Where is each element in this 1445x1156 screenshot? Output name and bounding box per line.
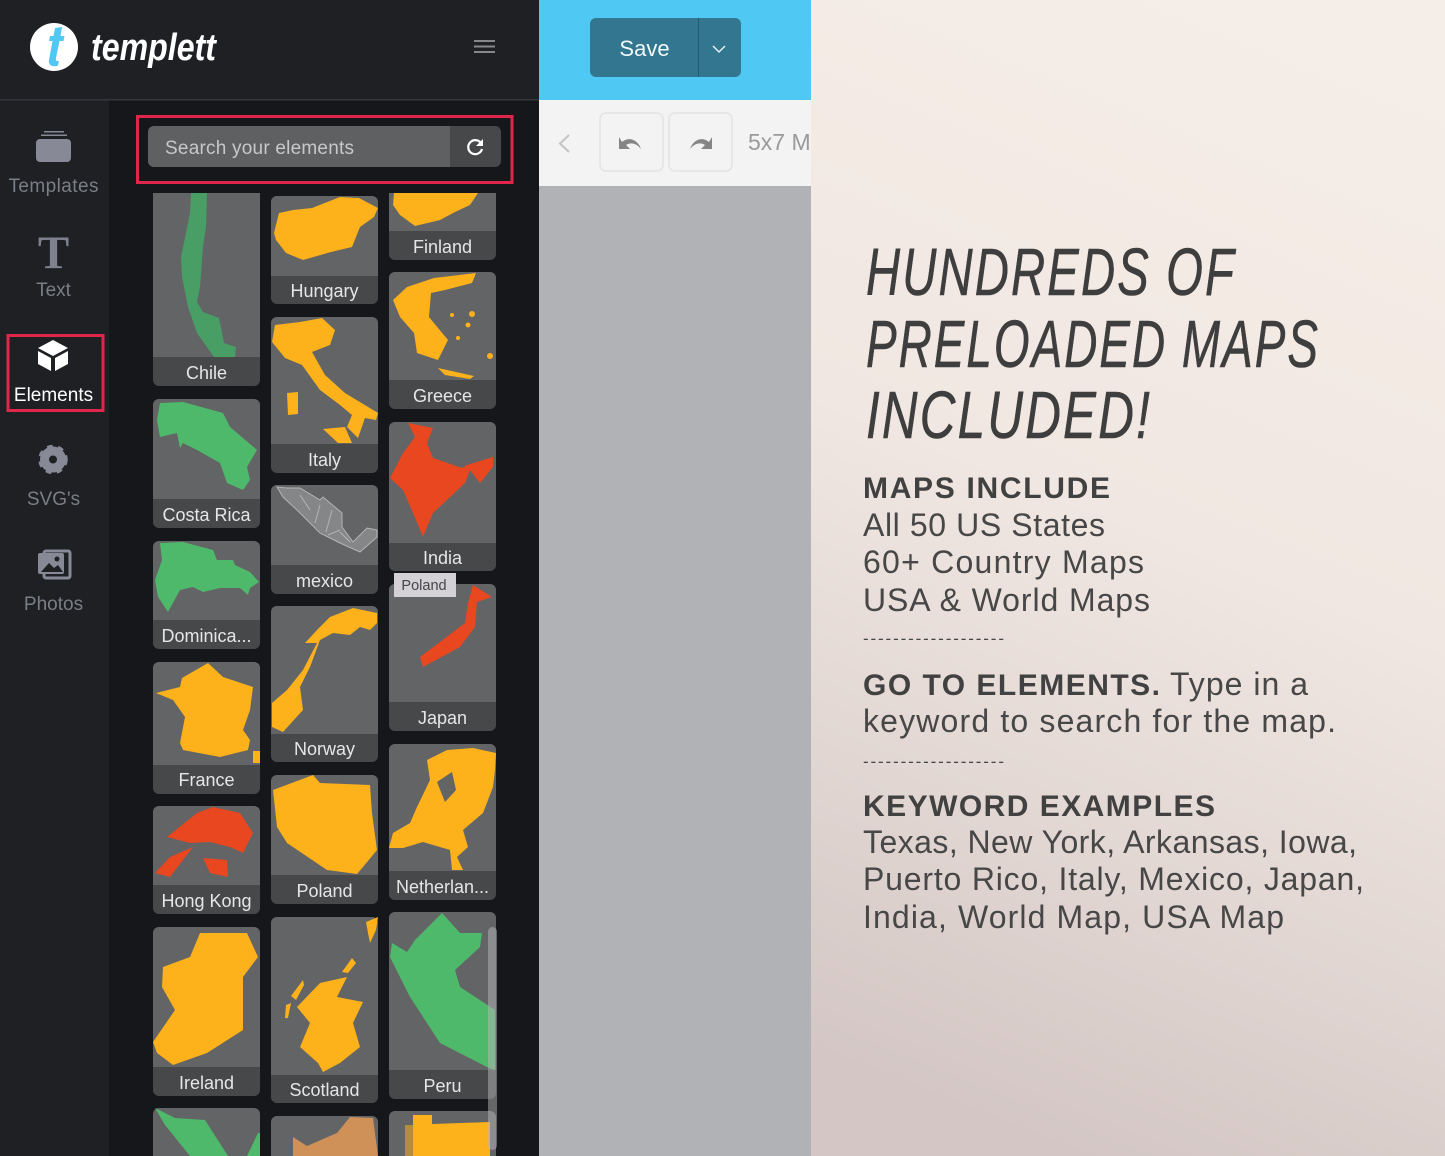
map tile: Norway: Norway [294,739,355,759]
map tile: Mexico green, cropped [153,1108,260,1156]
panel: right text background [811,0,1445,1156]
divider: dashes two: ------------------- [863,752,1004,771]
panel: elements browser background [109,100,539,1156]
button: save [590,18,741,77]
map tile: Ireland [153,927,260,1096]
map tile: Hong Kong: Hong Kong [161,891,252,911]
panel: editor toolbar [539,100,823,186]
map tile: Scotland: Scotland [289,1080,360,1100]
map tile: yellow map, cropped [389,1111,496,1156]
map tile: Costa Rica: Costa Rica [162,505,252,525]
tooltip: Poland [394,573,456,597]
map tile: Italy [271,317,378,473]
text block: maps include: MAPS INCLUDE [863,472,1110,505]
button: redo [669,113,732,171]
text block: go to elements: GO TO ELEMENTS. [863,669,1160,702]
nav: svgs [27,446,80,510]
map tile: Scotland [271,917,378,1103]
map tile: Hungary: Hungary [290,281,359,301]
text block: maps include: 60+ Country Maps [863,544,1144,580]
nav: photos: Photos [24,594,83,615]
text block: maps include: USA & World Maps [863,582,1150,618]
map tile: Greece [389,272,496,409]
map tile: Finland [389,193,496,260]
text block: keyword examples: India, World Map, USA Map [863,899,1284,935]
text block: maps include: All 50 US States [863,507,1105,543]
nav: svgs: SVG's [27,489,80,510]
search box with highlight: Search your elements [165,138,354,159]
map tile: Norway [271,606,378,762]
map tile: Chile [153,193,260,386]
title: INCLUDED! [866,378,1152,453]
nav: elements highlighted [8,336,103,410]
nav: text: T [38,227,69,279]
map tile: Chile: Chile [186,363,227,383]
icon: hamburger menu [474,41,495,52]
map tile: Hungary [271,196,378,304]
nav: text: Text [36,280,72,301]
map tile: Poland [271,775,378,904]
text block: go to elements [863,666,1336,739]
text block: maps include [863,472,1150,618]
map tile: tan map, cropped [271,1116,378,1156]
map tile: Dominican Republic [153,541,260,649]
map tile: Dominican Republic: Dominica... [161,626,252,646]
nav: templates: Templates [8,176,98,197]
title [866,235,1320,453]
map tile: Netherlands: Netherlan... [396,877,489,897]
map tile: France: France [178,770,235,790]
nav: elements highlighted: Elements [14,385,93,406]
map tile: Peru [389,912,496,1099]
panel: editor top bar with save button [539,0,811,100]
panel: grey canvas area [539,186,811,1156]
button: save: Save [619,36,670,61]
text block: keyword examples: Texas, New York, Arkansas, Iowa, [863,824,1357,860]
map tile: Poland: Poland [296,881,353,901]
icon: back chevron [560,135,569,152]
map tile: Finland: Finland [413,237,472,257]
map tile: Greece: Greece [413,386,472,406]
search box with highlight [138,116,512,182]
text block: go to elements: Type in a [1170,666,1308,702]
text block: keyword examples: KEYWORD EXAMPLES [863,790,1215,823]
map tile: Netherlands [389,744,496,900]
text block: keyword examples [863,790,1364,935]
nav: templates [8,131,98,197]
map tile: mexico outline [271,485,378,594]
map tile: Ireland: Ireland [179,1073,234,1093]
map tile: Peru: Peru [423,1076,462,1096]
text block: keyword examples: Puerto Rico, Italy, Mexico, Japan, [863,861,1364,897]
map tile: Japan: Japan [418,708,467,728]
text: document name: 5x7 Mo [748,129,823,155]
map tile: Japan [389,584,496,731]
button: undo [600,113,663,171]
panel: sidebar rail [0,100,109,1156]
map tile: France [153,662,260,794]
logo: templett: templett [91,27,217,69]
title: HUNDREDS OF [866,235,1237,310]
nav: photos [24,551,83,615]
map tile: Italy: Italy [308,450,341,470]
map tile: India: India [423,548,463,568]
icon: refresh [468,139,483,154]
map tile: mexico outline: mexico [296,571,353,591]
map tile: Hong Kong [153,806,260,914]
map tile: India [389,422,496,571]
map tile: Costa Rica [153,399,260,528]
tooltip: Poland: Poland [401,578,447,594]
divider: dashes one: ------------------- [863,629,1004,648]
nav: text [36,227,72,301]
panel: dark left header [0,0,539,100]
scrollbar [488,927,497,1150]
logo: templett [30,23,217,71]
text block: go to elements: keyword to search for the map. [863,703,1336,739]
